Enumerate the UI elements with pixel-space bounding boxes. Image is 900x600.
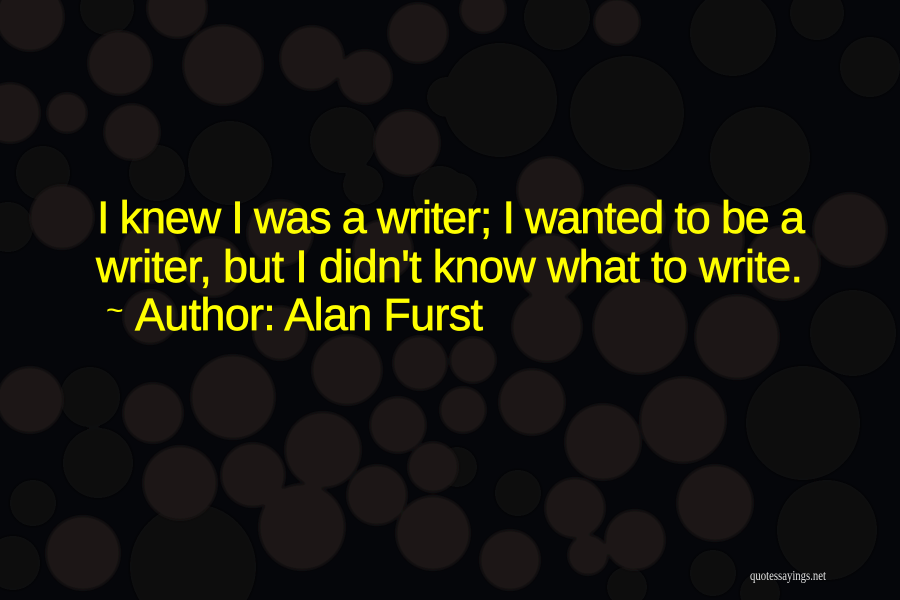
quote text: writer, but I didn't know what to write. xyxy=(95,241,803,292)
quote text xyxy=(95,192,806,292)
watermark: quotessayings.net xyxy=(750,569,826,584)
author attribution: Author: Alan Furst xyxy=(135,289,483,340)
quote text: I knew I was a writer; I wanted to be a xyxy=(97,192,806,243)
author attribution: ~ xyxy=(106,294,124,327)
